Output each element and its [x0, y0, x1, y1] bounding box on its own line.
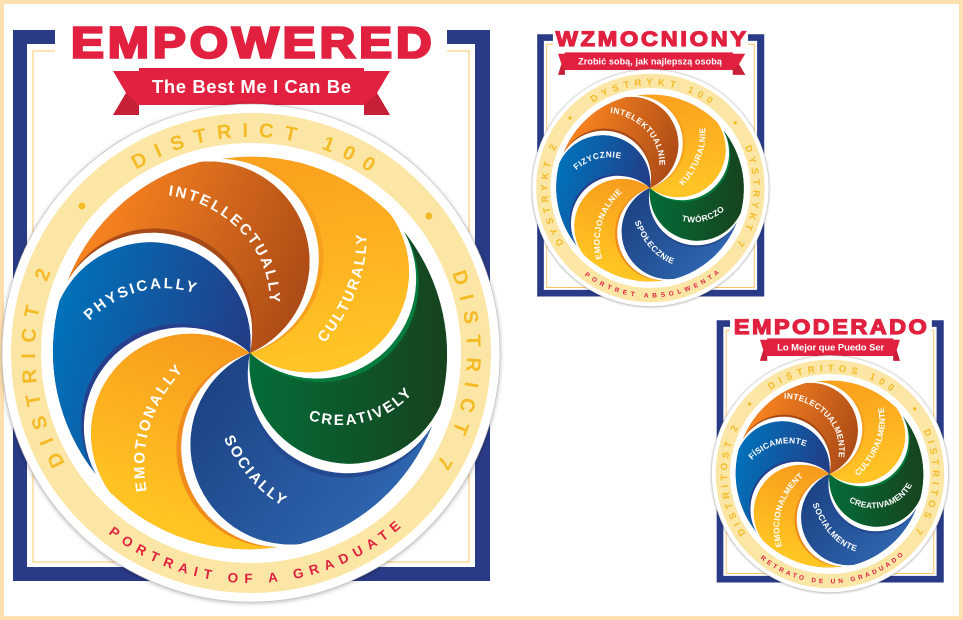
segment: culturally: CULTURALLY — [318, 234, 366, 341]
segment: emocjonalnie: EMOCJONALNIE — [594, 188, 622, 260]
frame — [717, 320, 944, 583]
ring text: District 2: DISTRICT 2 — [21, 268, 64, 469]
ribbon: tagline: The Best Me I Can Be — [152, 76, 351, 97]
segment: creativamente: CREATIVAMENTE — [850, 482, 912, 508]
medallion disc — [2, 104, 500, 602]
ring dot right — [734, 121, 737, 124]
ring text: Dystrykt 2: DYSTRYKT 2 — [540, 144, 564, 246]
segment: culturalmente — [816, 380, 906, 484]
segment: fisicamente: FÍSICAMENTE — [748, 438, 807, 460]
badge: Polish, Wzmocniony — [530, 27, 770, 308]
title: WZMOCNIONY — [556, 27, 746, 51]
ribbon: tagline — [760, 338, 900, 361]
badge: Spanish, Empoderado — [710, 315, 950, 594]
segment: socially — [190, 353, 432, 544]
ring band — [26, 128, 476, 578]
medallion disc — [711, 355, 948, 593]
segment: culturalmente: CULTURALMENTE — [855, 408, 885, 475]
ring text: Distritos 100: DISTRITOS 100 — [768, 364, 894, 390]
badge: English, Empowered — [0, 18, 503, 606]
segment: creatively — [249, 232, 448, 464]
ring text: District 100: DISTRICT 100 — [130, 123, 375, 170]
segment: physically: PHYSICALLY — [83, 278, 198, 320]
segment: kulturalnie — [637, 94, 726, 198]
frame — [537, 34, 764, 297]
ring text: Portret absolwenta: PORTRET ABSOLWENTA — [584, 270, 720, 298]
ring text: Dystrykt 100: DYSTRYKT 100 — [590, 78, 712, 103]
ring text: Portrait of a Graduate: PORTRAIT OF A GRADUATE — [108, 520, 401, 583]
segment: emotionally: EMOTIONALLY — [134, 364, 180, 492]
segment: socialmente — [801, 474, 916, 566]
ring text: Distritos 7: DISTRITOS 7 — [916, 428, 940, 536]
segment: intelektualnie: INTELEKTUALNIE — [610, 107, 666, 166]
ribbon: tagline — [113, 68, 390, 115]
segment: intellectually: INTELLECTUALLY — [169, 185, 280, 302]
segment: fizycznie: FIZYCZNIE — [573, 152, 622, 170]
segment: culturally — [222, 156, 409, 372]
ring band — [723, 367, 937, 581]
segment: intelectualmente: INTELECTUALMENTE — [784, 393, 845, 458]
title: EMPODERADO — [734, 315, 927, 339]
segment: tworczo — [650, 130, 744, 241]
segment: socially: SOCIALLY — [225, 435, 288, 504]
segment: tworczo: TWÓRCZO — [682, 206, 724, 222]
ring text: Dystrykt 7: DYSTRYKT 7 — [738, 144, 760, 248]
segment: intelectualmente — [743, 382, 858, 474]
segment: socialmente: SOCIALMENTE — [813, 502, 858, 552]
ring text: Retrato de un graduado: RETRATO DE UN GRADUADO — [760, 553, 902, 584]
segment: physically — [52, 242, 251, 474]
ribbon: tagline: Zrobić sobą, jak najlepszą osobą — [578, 57, 723, 67]
ring text: Distritos 2: DISTRITOST 2 — [720, 426, 746, 536]
frame — [13, 30, 490, 581]
ring text: District 7: DISTRICT 7 — [438, 270, 481, 471]
ring dot left — [748, 402, 751, 406]
segment: kulturalnie: KULTURALNIE — [679, 128, 706, 186]
segment: creativamente — [829, 416, 924, 527]
segment: intelektualnie — [564, 96, 678, 188]
ring dot right — [913, 407, 916, 410]
segment: spolecznie — [622, 188, 736, 280]
segment: spolecznie: SPOŁECZNIE — [635, 220, 674, 264]
segment: creatively: CREATIVELY — [310, 387, 410, 426]
ring dot left — [78, 202, 86, 210]
ring dot left — [568, 116, 572, 120]
segment: fizycznie — [556, 135, 650, 246]
segment: fisicamente — [736, 421, 830, 532]
medallion disc — [532, 69, 769, 307]
ring band — [543, 81, 758, 295]
ribbon: tagline — [558, 52, 745, 75]
ring dot right — [426, 212, 432, 220]
segment: intellectually — [68, 162, 310, 353]
segment: emocionalment — [754, 464, 842, 568]
ribbon: tagline: Lo Mejor que Puedo Ser — [777, 343, 885, 354]
segment: emocjonalnie — [574, 178, 663, 282]
segment: emocionalment: EMOCIONALMENT — [774, 472, 802, 548]
segment: emotionally — [91, 334, 278, 550]
title: EMPOWERED — [71, 18, 432, 67]
